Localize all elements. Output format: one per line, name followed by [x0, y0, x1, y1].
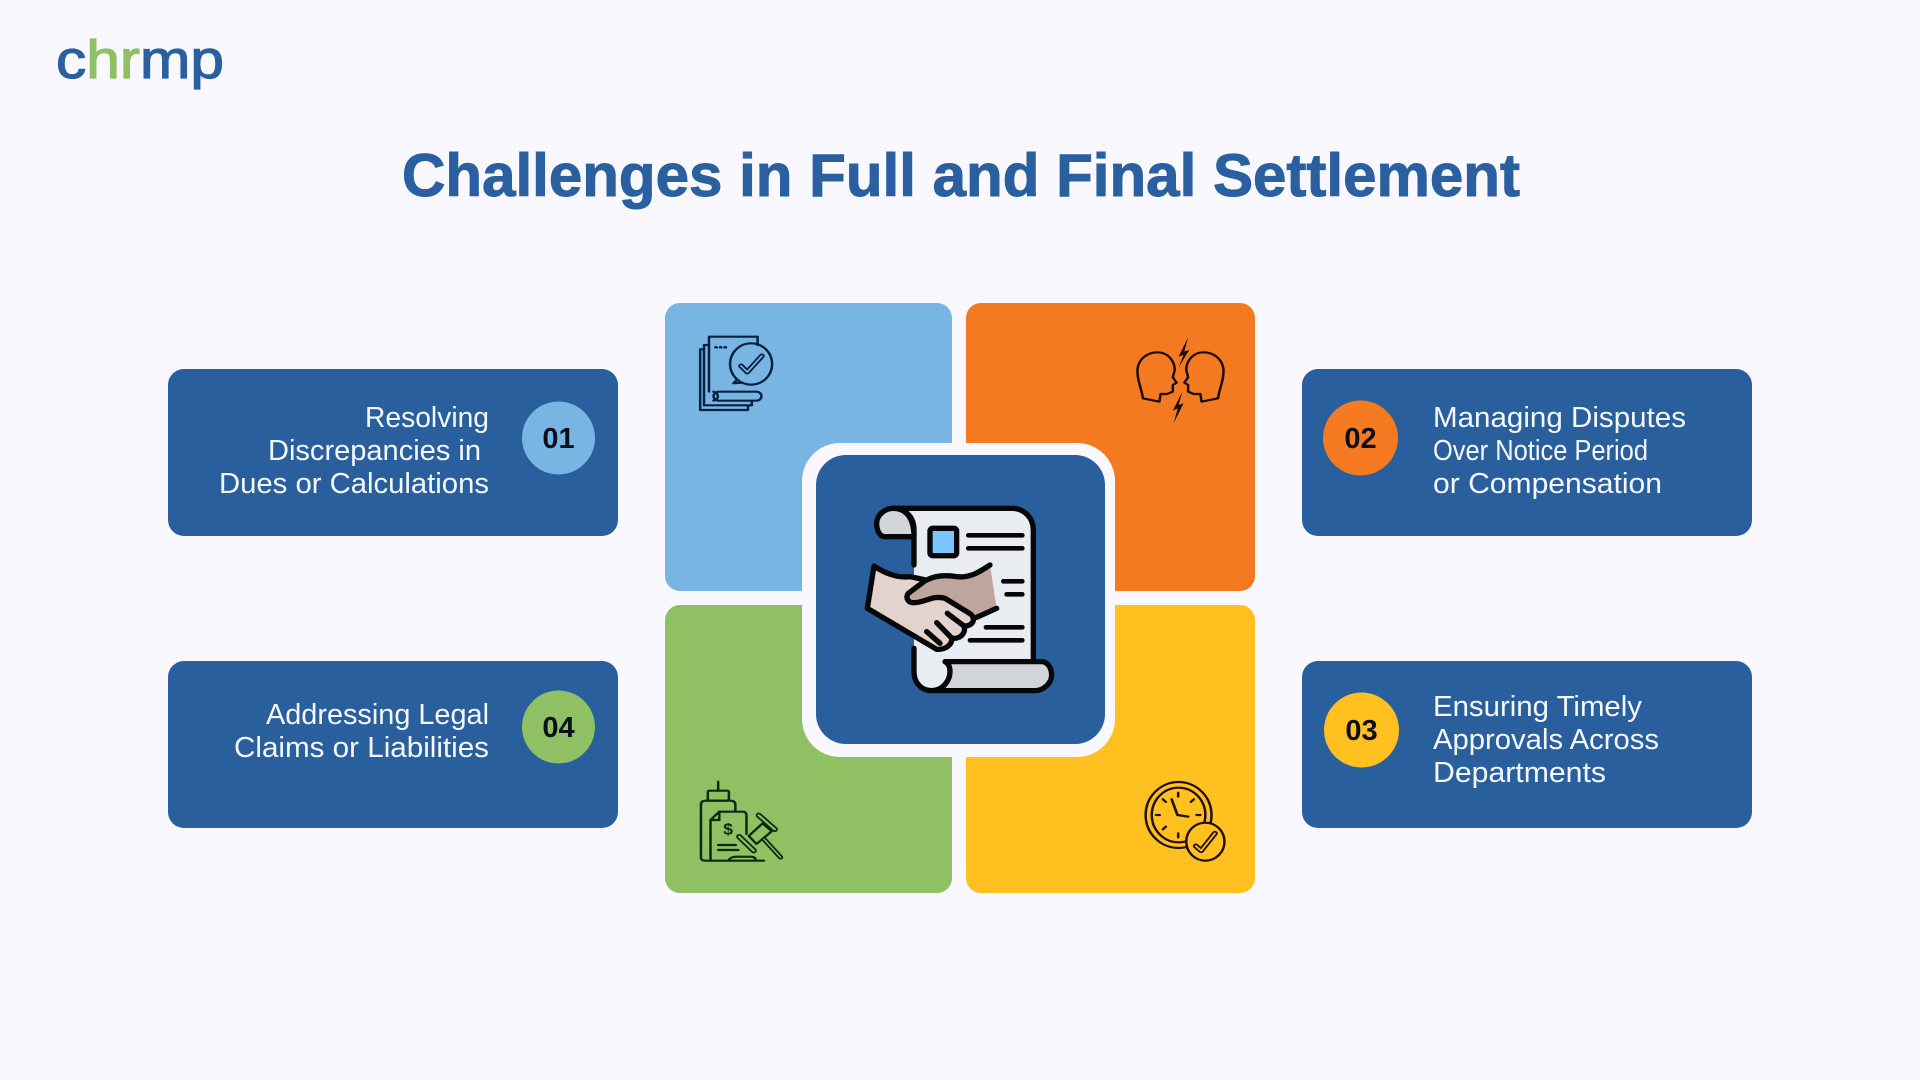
card 01 text: Dues or Calculations [219, 468, 489, 500]
badge 02: 02 [1344, 423, 1377, 455]
card 02 text: Over Notice Period [1433, 435, 1648, 467]
card 03: Ensuring Timely Approvals [1302, 661, 1752, 828]
badge 01 [522, 402, 595, 474]
badge 01: 01 [542, 423, 575, 455]
top curl [877, 508, 914, 537]
panel: orange quadrant [966, 303, 1255, 591]
scroll outline [893, 508, 1033, 691]
left hand [867, 566, 973, 649]
scroll body [893, 508, 1033, 691]
card 04 text: Claims or Liabilities [234, 732, 489, 764]
panel: blue quadrant [665, 303, 952, 591]
card 02: Managing Disputes [1302, 369, 1752, 536]
card 03 text [1433, 691, 1659, 789]
badge 04: 04 [542, 712, 575, 744]
card 04: Addressing Legal Claims [168, 661, 618, 828]
card 01: Resolving Discrepancies [168, 369, 618, 536]
icon: two heads in conflict [1137, 337, 1224, 423]
icon: settlement scroll with handshake [867, 508, 1052, 691]
document lines [968, 535, 1022, 640]
card 02 text: Managing Disputes [1433, 402, 1686, 434]
card 02 text: or Compensation [1433, 468, 1662, 500]
icon: legal gavel and building [701, 782, 781, 861]
picture square [930, 528, 957, 556]
icon: legal gavel and building: $ [723, 821, 733, 838]
finger lines [927, 613, 964, 643]
title: Challenges in Full and Final Settlement [402, 142, 1520, 209]
panel: yellow quadrant [966, 605, 1255, 893]
bottom roll [932, 662, 1052, 691]
right hand [907, 565, 997, 615]
card 01 text: Resolving [365, 402, 489, 434]
icon: document with check [700, 337, 772, 410]
card 01 text [219, 402, 489, 500]
panel: green quadrant [665, 605, 952, 893]
card 04 text [234, 699, 489, 764]
center panel: white frame and blue tile [802, 443, 1115, 757]
logo: chrmp: chrmp [56, 30, 224, 90]
badge 03 [1324, 692, 1399, 768]
card 02 text [1433, 402, 1686, 500]
card 03 text: Ensuring Timely [1433, 691, 1642, 723]
card 04 text: Addressing Legal [266, 699, 489, 731]
icon: clock with check [1146, 782, 1224, 861]
card 03 text: Departments [1433, 757, 1606, 789]
card 01 text: Discrepancies in [268, 435, 481, 467]
badge 02 [1323, 400, 1398, 476]
badge 03: 03 [1345, 715, 1378, 747]
badge 04 [522, 690, 595, 764]
card 03 text: Approvals Across [1433, 724, 1659, 756]
